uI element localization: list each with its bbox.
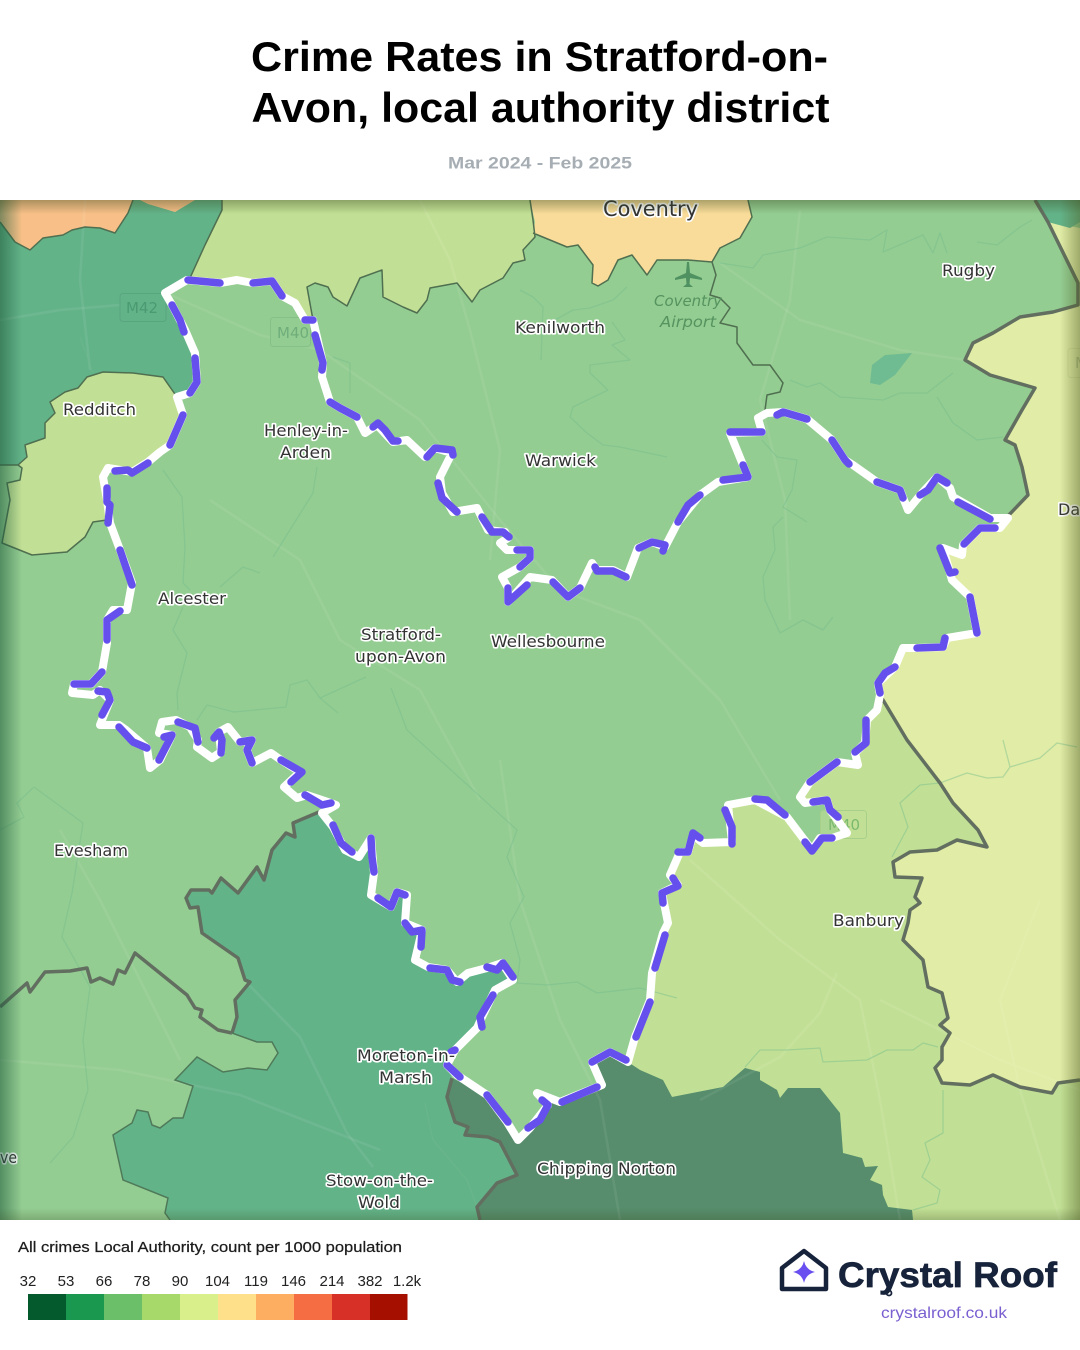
place label: Coventry Airport <box>654 295 722 330</box>
place labels: Moreton-in- <box>357 1046 455 1065</box>
place labels: Stow-on-the- <box>326 1171 433 1190</box>
place labels: Kenilworth <box>515 318 605 337</box>
place labels: Redditch <box>63 400 136 419</box>
region: Redditch <box>2 372 183 555</box>
place labels: Warwick <box>525 451 597 470</box>
title: Avon, local authority district <box>252 84 830 131</box>
icon: house with star <box>782 1251 826 1289</box>
district boundary: purple dashes <box>74 280 995 1128</box>
place labels: Da <box>1058 500 1080 519</box>
place labels: Stratford- <box>361 625 441 644</box>
place labels: Banbury <box>833 911 904 930</box>
legend scale values: 104 <box>205 1273 230 1290</box>
legend scale values: 32 <box>20 1273 36 1290</box>
motorway shields: M40 <box>828 816 860 834</box>
place labels: Marsh <box>379 1068 432 1087</box>
place label: Coventry Airport: Coventry <box>654 292 723 310</box>
icon: Coventry Airport plane <box>675 262 702 287</box>
region: Coventry <box>530 200 752 286</box>
region: top-left orange <box>0 200 133 250</box>
motorway shields: M42 <box>126 299 158 317</box>
place labels: Arden <box>280 443 331 462</box>
motorway shields <box>120 294 1080 838</box>
title <box>251 33 830 131</box>
title: Crime Rates in Stratford-on- <box>251 33 828 80</box>
legend scale values: 53 <box>58 1273 74 1290</box>
rivers <box>0 220 1077 1210</box>
place labels: Alcester <box>158 589 226 608</box>
region: Cotswold mid green <box>113 813 517 1220</box>
place labels: Evesham <box>54 841 128 860</box>
legend scale values: 214 <box>319 1273 345 1290</box>
choropleth map panel <box>0 197 1080 1220</box>
place labels: Coventry <box>603 197 698 221</box>
legend scale values: 78 <box>134 1273 150 1290</box>
wordmark: Crystal Roof <box>838 1256 1057 1295</box>
region: Cherwell yellow-green <box>628 695 1080 1220</box>
website link: crystalroof.co.uk <box>881 1305 1008 1322</box>
region: Solihull yellow-green <box>190 200 535 320</box>
boundary lines: thick <box>0 200 1080 1220</box>
subtitle: date range: Mar 2024 - Feb 2025 <box>448 154 632 172</box>
place labels: Wellesbourne <box>491 632 605 651</box>
boundary lines: thin <box>0 200 783 555</box>
region: top orange sliver <box>140 200 195 212</box>
legend title: All crimes Local Authority, count per 1000 population <box>18 1239 402 1256</box>
legend scale values <box>20 1273 422 1290</box>
legend scale values: 90 <box>172 1273 188 1290</box>
place labels: upon-Avon <box>355 647 446 666</box>
motorway shields: M40 <box>277 324 309 342</box>
legend scale values: 1.2k <box>393 1273 422 1290</box>
place labels: ve <box>0 1148 17 1167</box>
water: lake <box>870 353 912 385</box>
region: Daventry pale yellow <box>878 222 1080 1093</box>
legend scale values: 119 <box>244 1273 268 1290</box>
legend colour swatches <box>28 1294 408 1320</box>
place labels <box>0 197 1080 1212</box>
roads <box>0 200 1080 1220</box>
place labels: Chipping Norton <box>537 1159 676 1178</box>
region: north-west mid green <box>0 200 222 465</box>
place labels: Henley-in- <box>264 421 348 440</box>
place label: Coventry Airport: Airport <box>659 313 717 331</box>
place labels: Wold <box>358 1193 400 1212</box>
place labels: Rugby <box>942 261 995 280</box>
map edge vignette <box>0 200 1080 1220</box>
legend <box>18 1239 422 1320</box>
legend scale values: 382 <box>357 1273 383 1290</box>
legend scale values: 66 <box>96 1273 112 1290</box>
region: West Oxfordshire dark green <box>447 1052 913 1220</box>
region: top-right mid green <box>1035 200 1080 228</box>
logo: Crystal Roof <box>782 1251 1057 1322</box>
district boundary: Stratford-on-Avon white line <box>72 280 1008 1140</box>
legend scale values: 146 <box>281 1273 306 1290</box>
